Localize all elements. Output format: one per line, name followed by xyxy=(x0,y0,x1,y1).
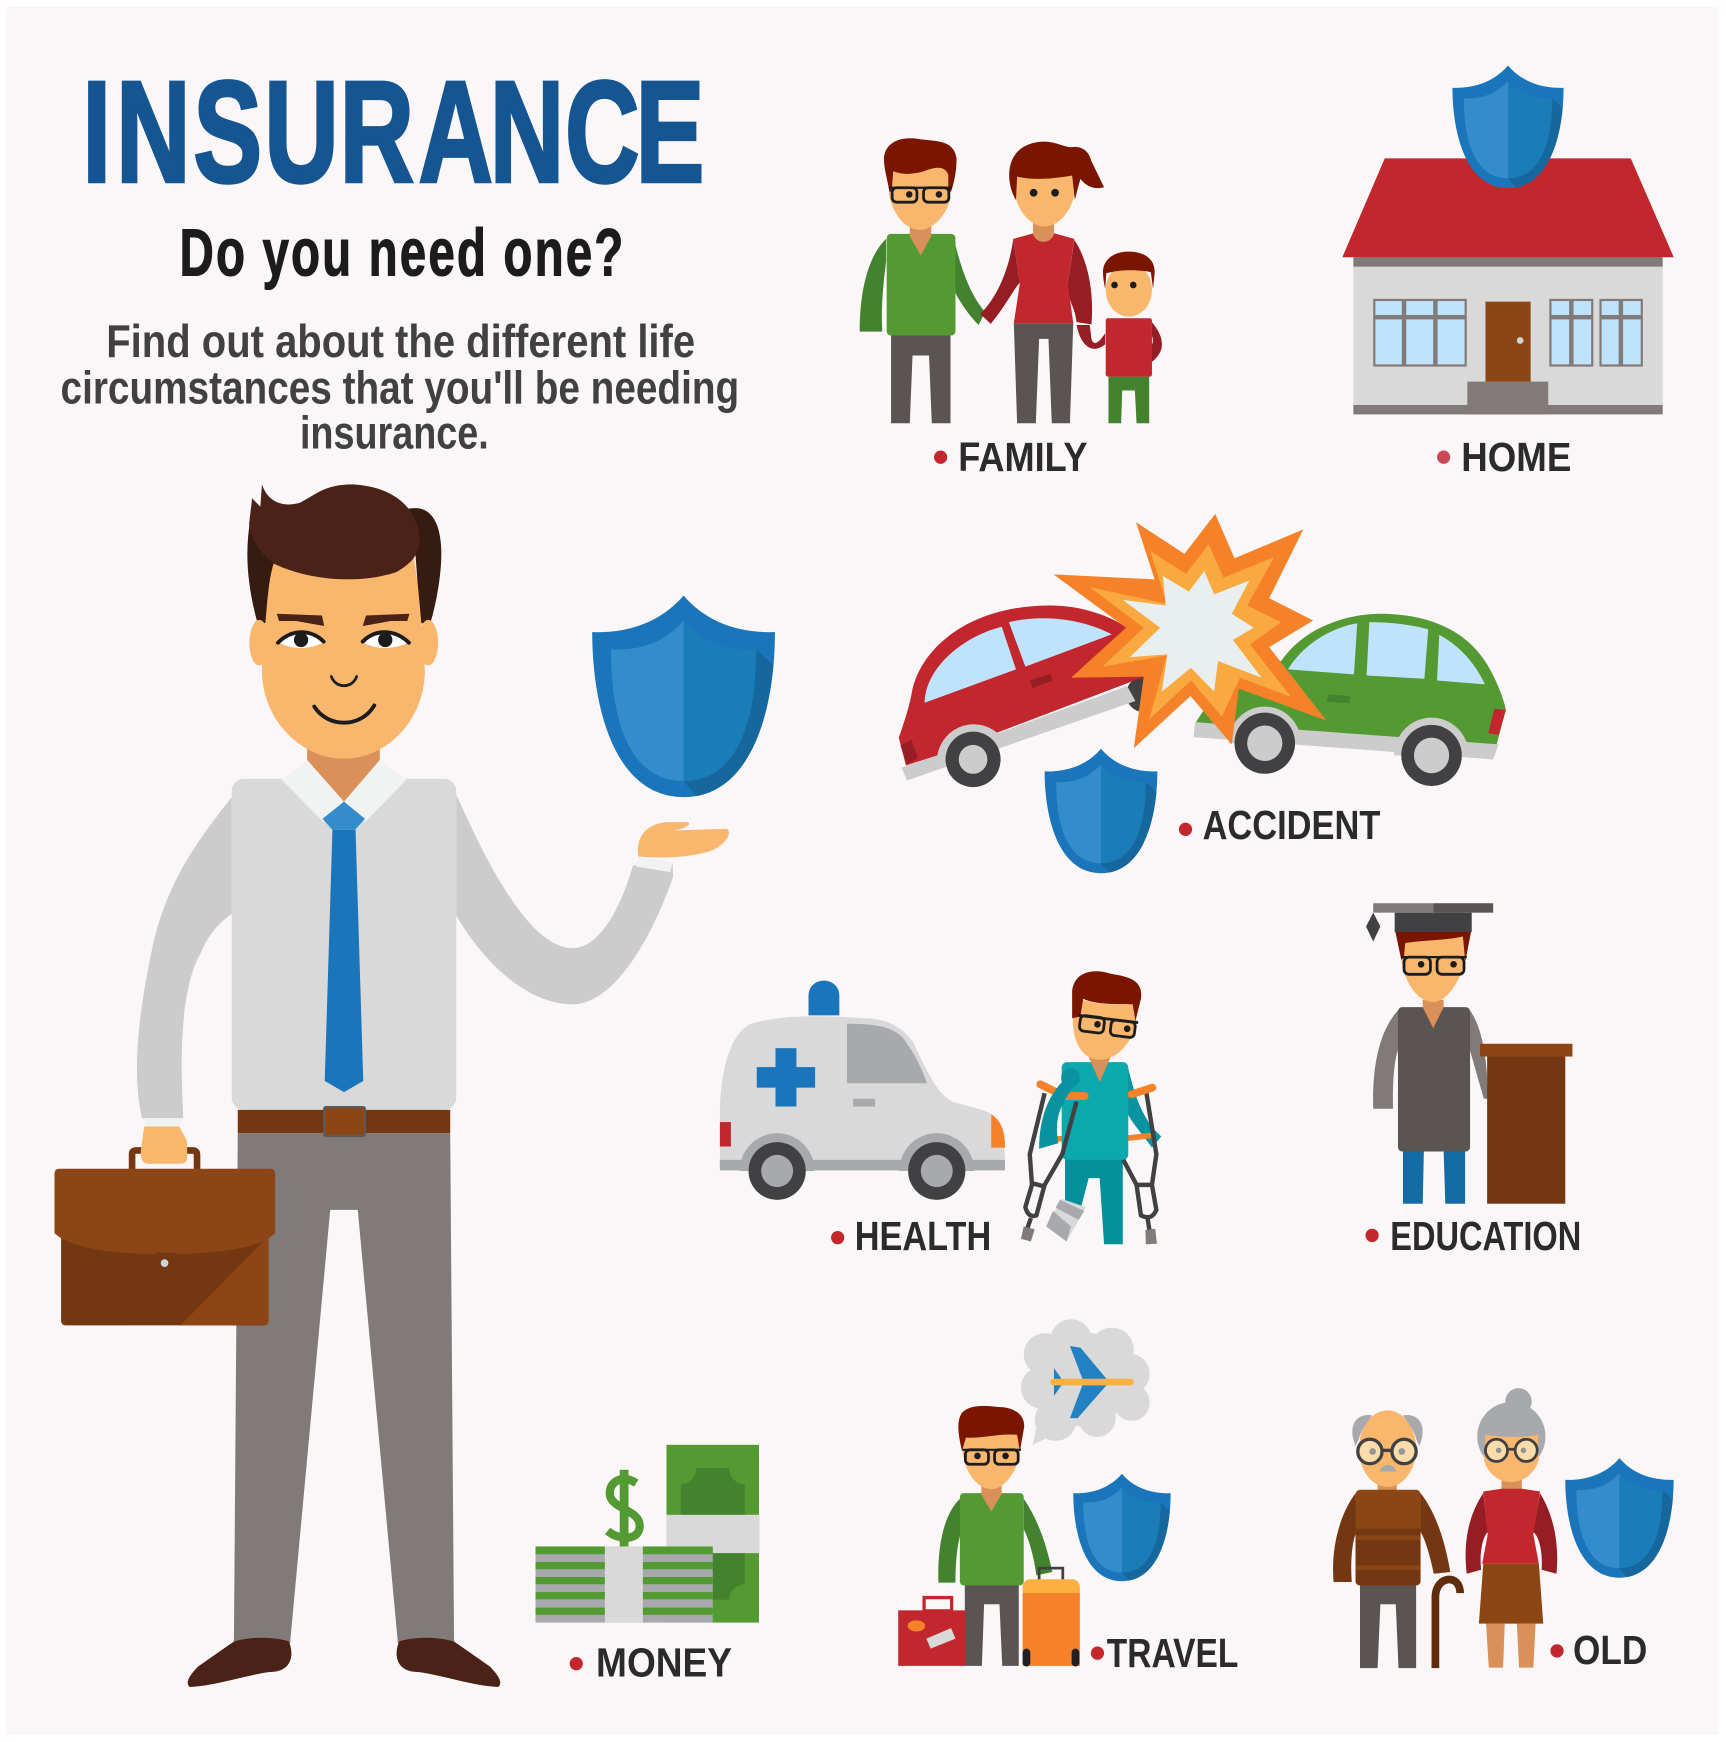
money illustration xyxy=(536,981,1005,1685)
label: health: HEALTH xyxy=(855,1213,991,1259)
man: ears xyxy=(249,620,438,665)
label: family: FAMILY xyxy=(958,434,1088,480)
man: left cuff xyxy=(144,1118,182,1127)
man on crutches xyxy=(1021,971,1161,1244)
graduate xyxy=(1366,903,1493,1204)
accident shield xyxy=(1045,749,1160,876)
lower right illustrations xyxy=(898,903,1676,1676)
orange suitcase xyxy=(1023,1568,1080,1666)
man: gripping hand xyxy=(141,1127,187,1164)
label: travel: TRAVEL xyxy=(1107,1630,1238,1676)
back banknote xyxy=(667,1445,760,1623)
label: old: OLD xyxy=(1573,1627,1647,1673)
man: briefcase xyxy=(54,1169,275,1325)
mother xyxy=(980,142,1104,423)
man: briefcase handle xyxy=(132,1150,197,1170)
label: old xyxy=(1550,1627,1647,1673)
man: neck xyxy=(307,744,380,803)
father xyxy=(860,138,985,423)
businessman figure xyxy=(54,484,729,1687)
thought bubble with airplane xyxy=(1021,1319,1150,1445)
traveller xyxy=(938,1406,1052,1666)
label: education: EDUCATION xyxy=(1390,1213,1581,1259)
old age shield xyxy=(1565,1458,1676,1580)
man: front hair xyxy=(249,484,420,579)
intro paragraph: Find out about the different life xyxy=(106,315,695,367)
man: right cuff xyxy=(636,857,673,872)
old man xyxy=(1333,1410,1450,1668)
label: money: MONEY xyxy=(596,1639,732,1685)
intro paragraph: circumstances that you'll be needing xyxy=(61,361,739,413)
man: open hand xyxy=(638,822,729,858)
man: eyebrows xyxy=(277,614,409,626)
intro paragraph xyxy=(61,315,739,458)
man: belt and buckle xyxy=(238,1107,450,1136)
red bag xyxy=(898,1598,965,1666)
man: back hair xyxy=(247,508,441,623)
man: face xyxy=(262,558,425,759)
title: INSURANCE xyxy=(82,50,704,213)
ambulance xyxy=(720,981,1005,1200)
man: smile xyxy=(314,705,374,723)
large shield xyxy=(592,595,779,801)
home shield xyxy=(1452,66,1566,191)
label: home: HOME xyxy=(1461,434,1571,480)
man: tie xyxy=(323,802,365,1092)
podium xyxy=(1480,1044,1572,1204)
man: right sleeve xyxy=(456,794,673,1004)
man: left sleeve xyxy=(137,797,232,1118)
subtitle: Do you need one? xyxy=(180,217,623,290)
man: nose xyxy=(331,677,357,686)
family illustration xyxy=(860,66,1674,876)
icon: dollar sign xyxy=(608,1470,640,1546)
walking cane xyxy=(1435,1579,1460,1668)
man: eyes xyxy=(278,632,409,648)
child xyxy=(1077,252,1162,423)
collision burst xyxy=(1053,514,1326,748)
old woman xyxy=(1466,1388,1557,1668)
house xyxy=(1342,158,1674,414)
man: collar xyxy=(282,760,406,822)
red car xyxy=(899,605,1161,787)
front banknote stack xyxy=(536,1546,713,1623)
man: shirt xyxy=(232,779,456,1110)
man: shoes xyxy=(188,1638,500,1687)
travel shield xyxy=(1073,1474,1173,1583)
man: trousers xyxy=(234,1133,454,1643)
label: accident: ACCIDENT xyxy=(1203,802,1381,848)
intro paragraph: insurance. xyxy=(300,406,489,458)
green car xyxy=(1194,614,1506,786)
man: lower body xyxy=(188,1133,500,1687)
man: briefcase and hand xyxy=(54,1118,275,1325)
